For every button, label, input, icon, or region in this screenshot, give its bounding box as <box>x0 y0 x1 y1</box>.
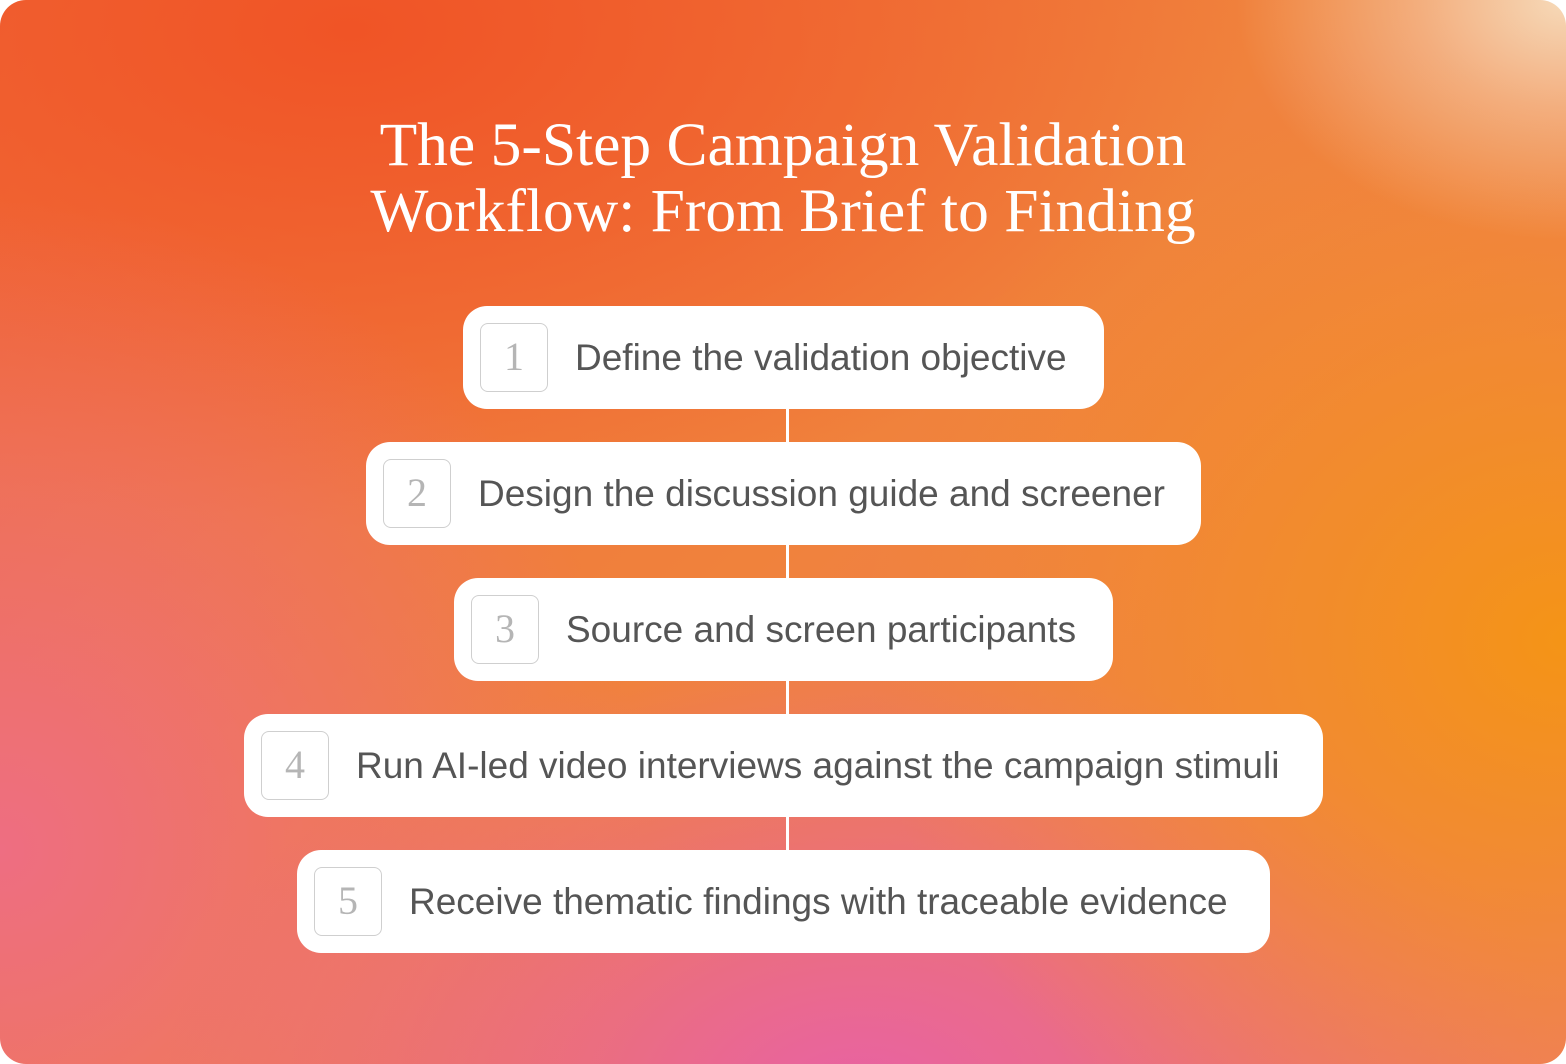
step 2 card: Design the discussion guide and screener <box>478 473 1165 514</box>
step 5 card <box>297 850 1270 953</box>
step 1 card <box>463 306 1104 409</box>
title: The 5-Step Campaign Validation <box>380 111 1186 179</box>
step 5 card: Receive thematic findings with traceable evidence <box>409 881 1228 922</box>
step 5 card: 5 <box>338 878 358 923</box>
title: Workflow: From Brief to Finding <box>370 177 1196 245</box>
title <box>370 111 1196 245</box>
step 1 card: Define the validation objective <box>575 337 1067 378</box>
connector line <box>786 400 789 860</box>
step 1 card: 1 <box>504 334 524 379</box>
step 2 card <box>366 442 1201 545</box>
step 3 card: Source and screen participants <box>566 609 1076 650</box>
step 4 card: Run AI-led video interviews against the campaign stimuli <box>356 745 1279 786</box>
step 3 card: 3 <box>495 606 515 651</box>
step 4 card: 4 <box>285 742 305 787</box>
step 3 card <box>454 578 1113 681</box>
step 2 card: 2 <box>407 470 427 515</box>
step 4 card <box>244 714 1323 817</box>
